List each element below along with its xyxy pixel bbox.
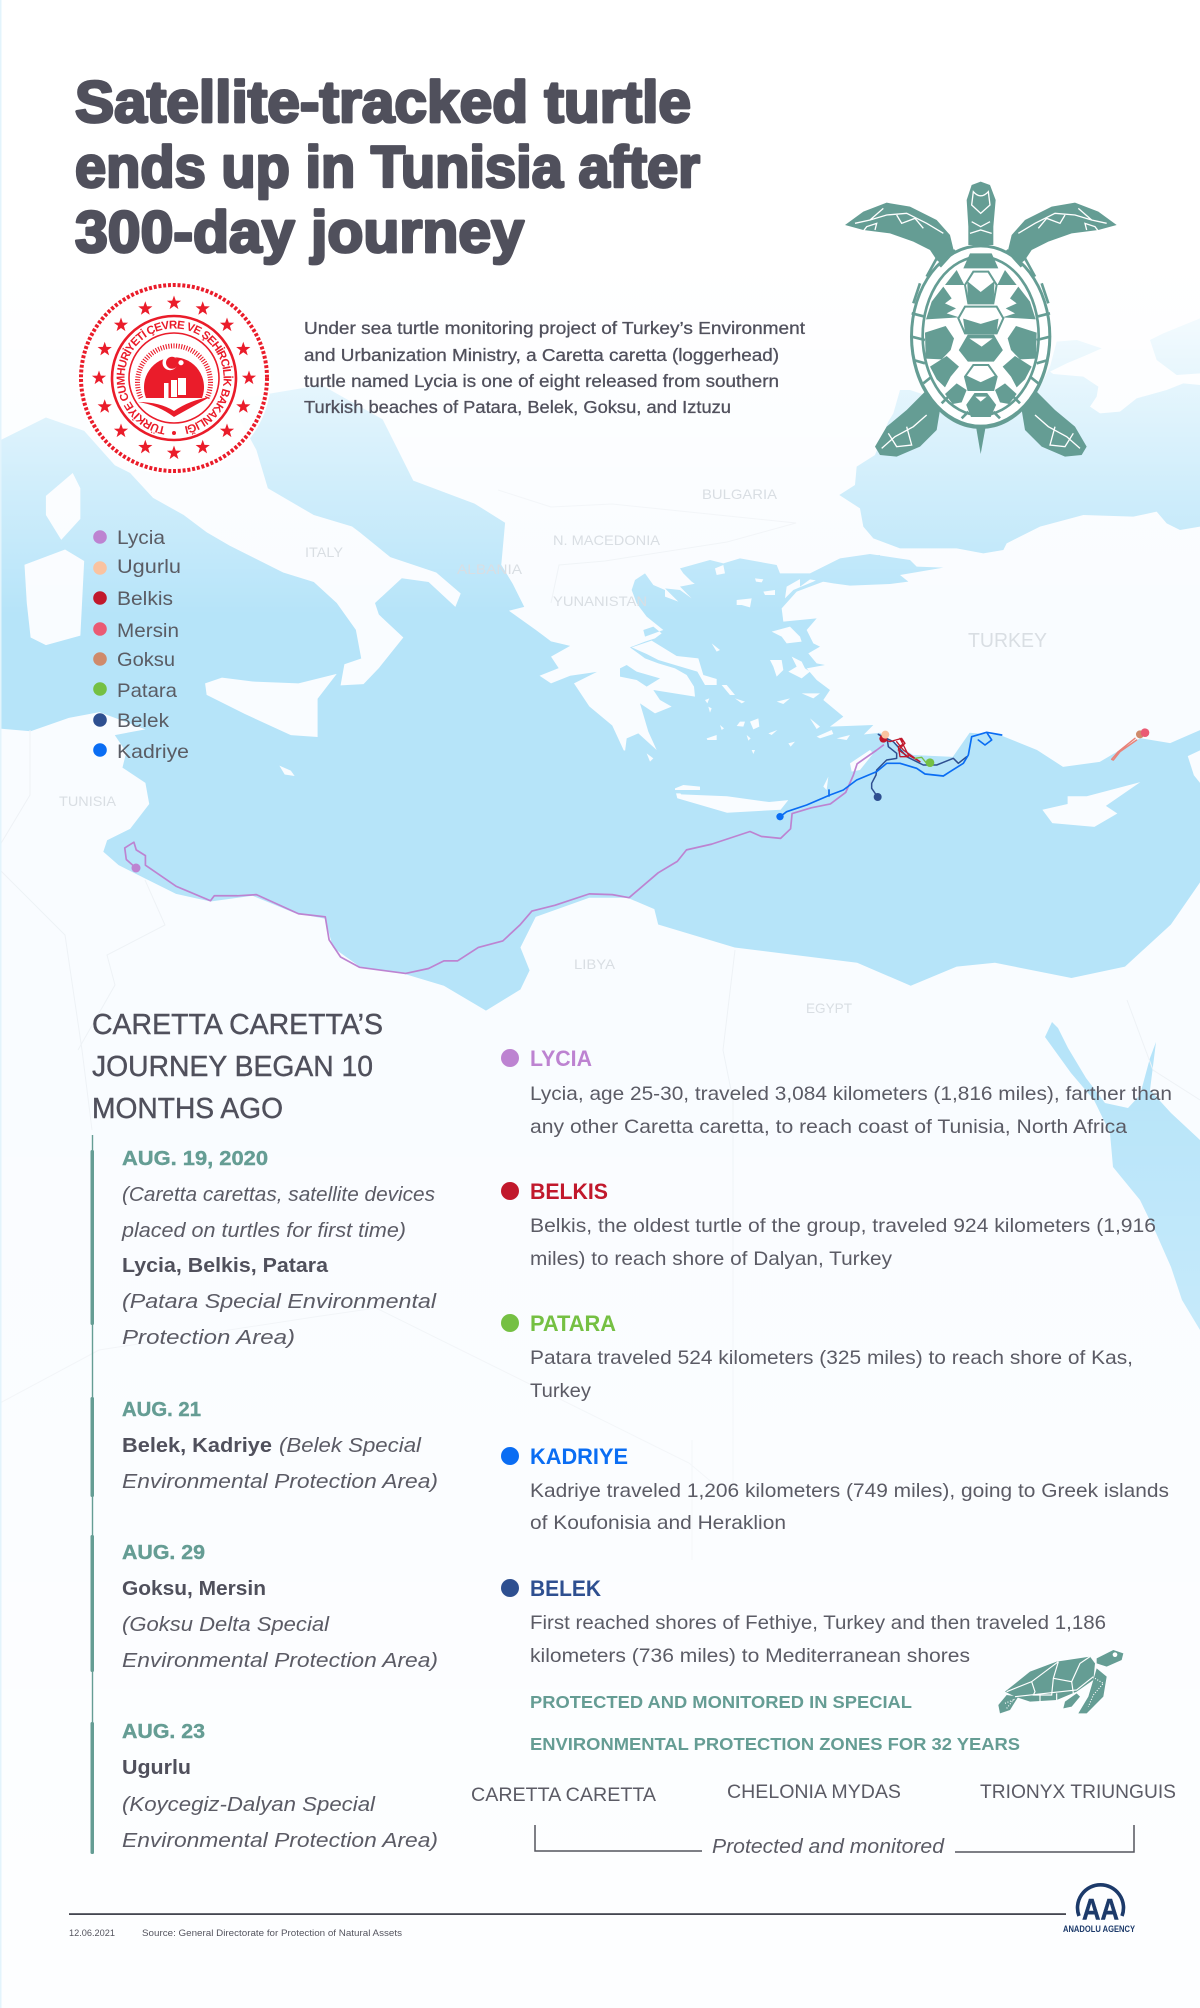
map labels: N. MACEDONIA (553, 532, 661, 548)
map labels: BULGARIA (702, 486, 778, 502)
timeline: Aug. 29: (Goksu Delta Special (122, 1614, 330, 1636)
icon: ministry seal: TÜRKİYE CUMHURİYETİ ÇEVRE VE ŞEHİRCİLİK BAKANLIĞI (116, 320, 234, 435)
legend: Goksu: Goksu (117, 649, 175, 671)
species: Caretta caretta: CARETTA CARETTA (471, 1784, 656, 1806)
entry: Patara (501, 1311, 1133, 1402)
map labels: YUNANISTAN (553, 593, 647, 609)
timeline: Aug. 19, 2020: (Patara Special Environmental (122, 1291, 437, 1313)
legend: Kadriye (93, 741, 189, 763)
legend: Belek: Belek (117, 710, 169, 732)
entry: Belkis (501, 1179, 1156, 1270)
timeline: Aug. 23 (122, 1720, 438, 1852)
legend: Kadriye: Kadriye (117, 741, 189, 763)
entry: Belek: kilometers (736 miles) to Mediterranean shores (530, 1645, 970, 1667)
map labels: TURKEY (968, 630, 1047, 652)
map labels: LIBYA (574, 956, 616, 972)
icon: small side-view turtle (998, 1650, 1123, 1713)
entry: Kadriye (501, 1444, 1169, 1534)
species: Chelonia mydas: CHELONIA MYDAS (727, 1781, 901, 1803)
legend: Belkis: Belkis (117, 588, 173, 610)
route: Patara (915, 757, 934, 767)
logo: Anadolu Agency: AA (1082, 1894, 1119, 1926)
legend: Lycia (93, 527, 165, 549)
intro text: turtle named Lycia is one of eight released from southern (304, 371, 779, 391)
species: Trionyx triunguis: TRIONYX TRIUNGUIS (980, 1781, 1176, 1803)
footer source: Source: General Directorate for Protection of Natural Assets (142, 1928, 403, 1938)
title: 300-day journey (75, 200, 524, 265)
route: Lycia (125, 745, 884, 973)
legend: Lycia: Lycia (117, 527, 165, 549)
timeline: Aug. 21 (122, 1398, 438, 1493)
protected zones heading (530, 1692, 1020, 1754)
timeline: Aug. 23: AUG. 23 (122, 1720, 205, 1743)
timeline: Aug. 21: Environmental Protection Area) (122, 1471, 438, 1493)
legend: Belkis (93, 588, 173, 610)
entry: Belkis: miles) to reach shore of Dalyan, Turkey (530, 1248, 892, 1270)
top fade (0, 0, 1200, 260)
entry: Kadriye: of Koufonisia and Heraklion (530, 1512, 786, 1534)
timeline: Aug. 19, 2020: Protection Area) (122, 1327, 295, 1349)
title (75, 70, 700, 265)
marker: Ugurlu (881, 731, 889, 739)
timeline: Aug. 23: Ugurlu (122, 1757, 191, 1779)
legend: Mersin: Mersin (117, 620, 179, 642)
legend: Patara: Patara (117, 680, 177, 702)
heading: journey: CARETTA CARETTA’S (92, 1009, 383, 1041)
timeline: Aug. 19, 2020: (Caretta carettas, satellite devices (122, 1184, 435, 1206)
timeline: Aug. 19, 2020 (121, 1147, 437, 1349)
map: Red Sea (1045, 1022, 1200, 1330)
entry: Lycia: any other Caretta caretta, to reach coast of Tunisia, North Africa (530, 1116, 1127, 1138)
timeline: Aug. 29 (122, 1541, 438, 1672)
bracket: protected and monitored (535, 1825, 1134, 1858)
timeline: Aug. 29: Goksu, Mersin (122, 1578, 266, 1600)
timeline: Aug. 21: AUG. 21 (122, 1398, 201, 1421)
legend: Ugurlu: Ugurlu (117, 556, 181, 578)
route: Kadriye (776, 732, 1002, 820)
entry: Kadriye: Kadriye traveled 1,206 kilometers (749 miles), going to Greek islands (530, 1480, 1169, 1502)
logo: Anadolu Agency: ANADOLU AGENCY (1063, 1924, 1136, 1935)
map: faint borders (0, 490, 1200, 1560)
marginal scute lines (912, 250, 1050, 418)
protected zones heading: ENVIRONMENTAL PROTECTION ZONES FOR 32 YEARS (530, 1734, 1020, 1754)
legend (93, 527, 189, 763)
legend: Belek (93, 710, 169, 732)
intro text: and Urbanization Ministry, a Caretta caretta (loggerhead) (304, 345, 779, 365)
heading: journey: MONTHS AGO (92, 1093, 283, 1125)
entry: Patara: PATARA (530, 1311, 616, 1336)
intro text: Turkish beaches of Patara, Belek, Goksu, and Iztuzu (304, 397, 731, 417)
bracket: protected and monitored: Protected and monitored (712, 1836, 945, 1858)
icon: large sea turtle (845, 182, 1117, 457)
entry: Belek (501, 1576, 1106, 1667)
entry: Lycia: LYCIA (530, 1046, 592, 1071)
map labels: TUNISIA (59, 793, 117, 809)
bottom fade (0, 1050, 1200, 2008)
intro text: Under sea turtle monitoring project of Turkey’s Environment (304, 318, 805, 338)
legend: Ugurlu (93, 556, 181, 578)
legend: Patara (93, 680, 177, 702)
map labels (59, 486, 1047, 1016)
map fade overlay (0, 260, 1200, 615)
logo: Anadolu Agency (1063, 1885, 1136, 1935)
route: Belkis (879, 735, 920, 762)
entry: Lycia: Lycia, age 25-30, traveled 3,084 kilometers (1,816 miles), farther than (530, 1083, 1172, 1105)
entry: Belkis: Belkis, the oldest turtle of the group, traveled 924 kilometers (1,916 (530, 1215, 1156, 1237)
map: Mediterranean base (0, 0, 1200, 1062)
entry: Belek: First reached shores of Fethiye, Turkey and then traveled 1,186 (530, 1612, 1106, 1634)
entry: Patara: Turkey (530, 1380, 591, 1402)
entry: Belkis: BELKIS (530, 1179, 608, 1204)
costal scutes (925, 253, 1037, 404)
timeline: Aug. 21: (Belek Special (279, 1435, 422, 1457)
footer rule (69, 1913, 1066, 1915)
routes: eastern tracks (776, 728, 1149, 820)
timeline: Aug. 19, 2020: AUG. 19, 2020 (122, 1147, 268, 1170)
timeline: Aug. 23: Environmental Protection Area) (122, 1830, 438, 1852)
legend: Mersin (93, 620, 179, 642)
heading: journey: JOURNEY BEGAN 10 (92, 1051, 373, 1083)
flipper and head veins (855, 192, 1107, 448)
map labels: EGYPT (806, 1000, 852, 1016)
title: Satellite-tracked turtle (75, 70, 691, 135)
timeline: Aug. 29: AUG. 29 (122, 1541, 205, 1564)
map labels: ITALY (305, 544, 344, 560)
timeline rail (90, 1135, 94, 1854)
entry: Kadriye: KADRIYE (530, 1444, 628, 1469)
timeline: Aug. 19, 2020: placed on turtles for first time) (121, 1220, 406, 1242)
protected zones heading: PROTECTED AND MONITORED IN SPECIAL (530, 1692, 912, 1712)
legend: Goksu (93, 649, 175, 671)
heading: journey (92, 1009, 383, 1125)
title: ends up in Tunisia after (75, 135, 700, 200)
vertebral scutes (958, 272, 1003, 416)
left edge (0, 0, 2, 2008)
intro text (304, 318, 805, 417)
map: Black Sea, Sea of Azov and Marmara (800, 318, 1200, 587)
footer date: 12.06.2021 (69, 1928, 115, 1938)
route: Mersin and Goksu (1112, 728, 1149, 760)
timeline: Aug. 21: Belek, Kadriye (122, 1435, 272, 1457)
map: Aegean Sea with islands (620, 555, 883, 793)
map labels: ALBANIA (457, 561, 523, 577)
timeline: Aug. 29: Environmental Protection Area) (122, 1650, 438, 1672)
icon: ministry seal (79, 283, 270, 473)
timeline: Aug. 19, 2020: Lycia, Belkis, Patara (122, 1255, 329, 1277)
timeline: Aug. 23: (Koycegiz-Dalyan Special (122, 1794, 376, 1816)
route: Belek (872, 734, 967, 801)
entry: Lycia (501, 1046, 1172, 1138)
entry: Patara: Patara traveled 524 kilometers (325 miles) to reach shore of Kas, (530, 1347, 1133, 1369)
entry: Belek: BELEK (530, 1576, 601, 1601)
